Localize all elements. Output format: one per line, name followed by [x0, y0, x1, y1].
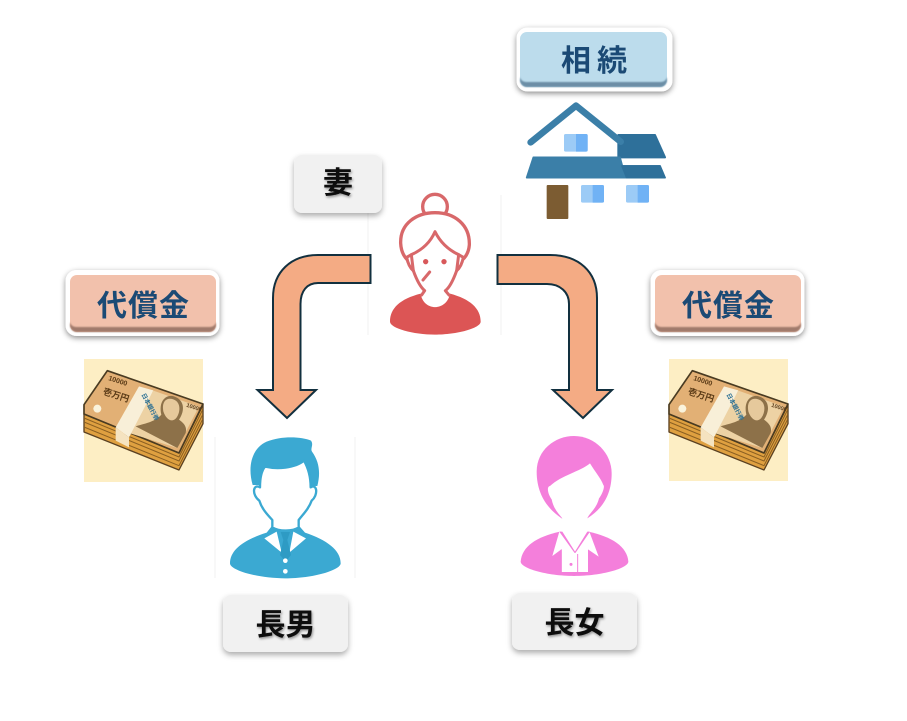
label: 妻 [294, 155, 382, 213]
label: 代償金 left: 代償金 [97, 290, 189, 323]
icon: banknote stack right: 壱万円 [687, 385, 716, 404]
icon: banknote stack right [669, 359, 788, 481]
icon: eldest daughter [521, 436, 628, 576]
icon: banknote stack right: 日本銀行券 [725, 392, 746, 422]
label: 長女 [512, 593, 637, 650]
icon: banknote stack left: 10000 [107, 375, 128, 388]
label: 相続: 相続 [561, 45, 633, 78]
arrow: wife to eldest daughter [498, 255, 612, 418]
icon: house [527, 106, 665, 219]
icon: banknote stack left [84, 359, 203, 482]
label: 妻: 妻 [323, 167, 353, 200]
label: 長女: 長女 [544, 607, 604, 640]
label: 長男 [223, 595, 348, 652]
arrow: wife to eldest son [258, 255, 370, 418]
icon: wife [390, 194, 481, 335]
icon: banknote stack right: 10000 [692, 375, 713, 388]
label: 相続 [516, 28, 672, 92]
icon: banknote stack left: 10000 [185, 403, 202, 413]
icon: banknote stack right: 10000 [770, 403, 787, 413]
icon: banknote stack left: 日本銀行券 [140, 392, 161, 422]
label: 長男: 長男 [256, 609, 316, 642]
label: 代償金 right: 代償金 [682, 290, 774, 323]
label: 代償金 left [66, 270, 220, 336]
label: 代償金 right [650, 270, 804, 336]
icon: banknote stack left: 壱万円 [102, 385, 131, 404]
icon: eldest son [230, 437, 341, 578]
